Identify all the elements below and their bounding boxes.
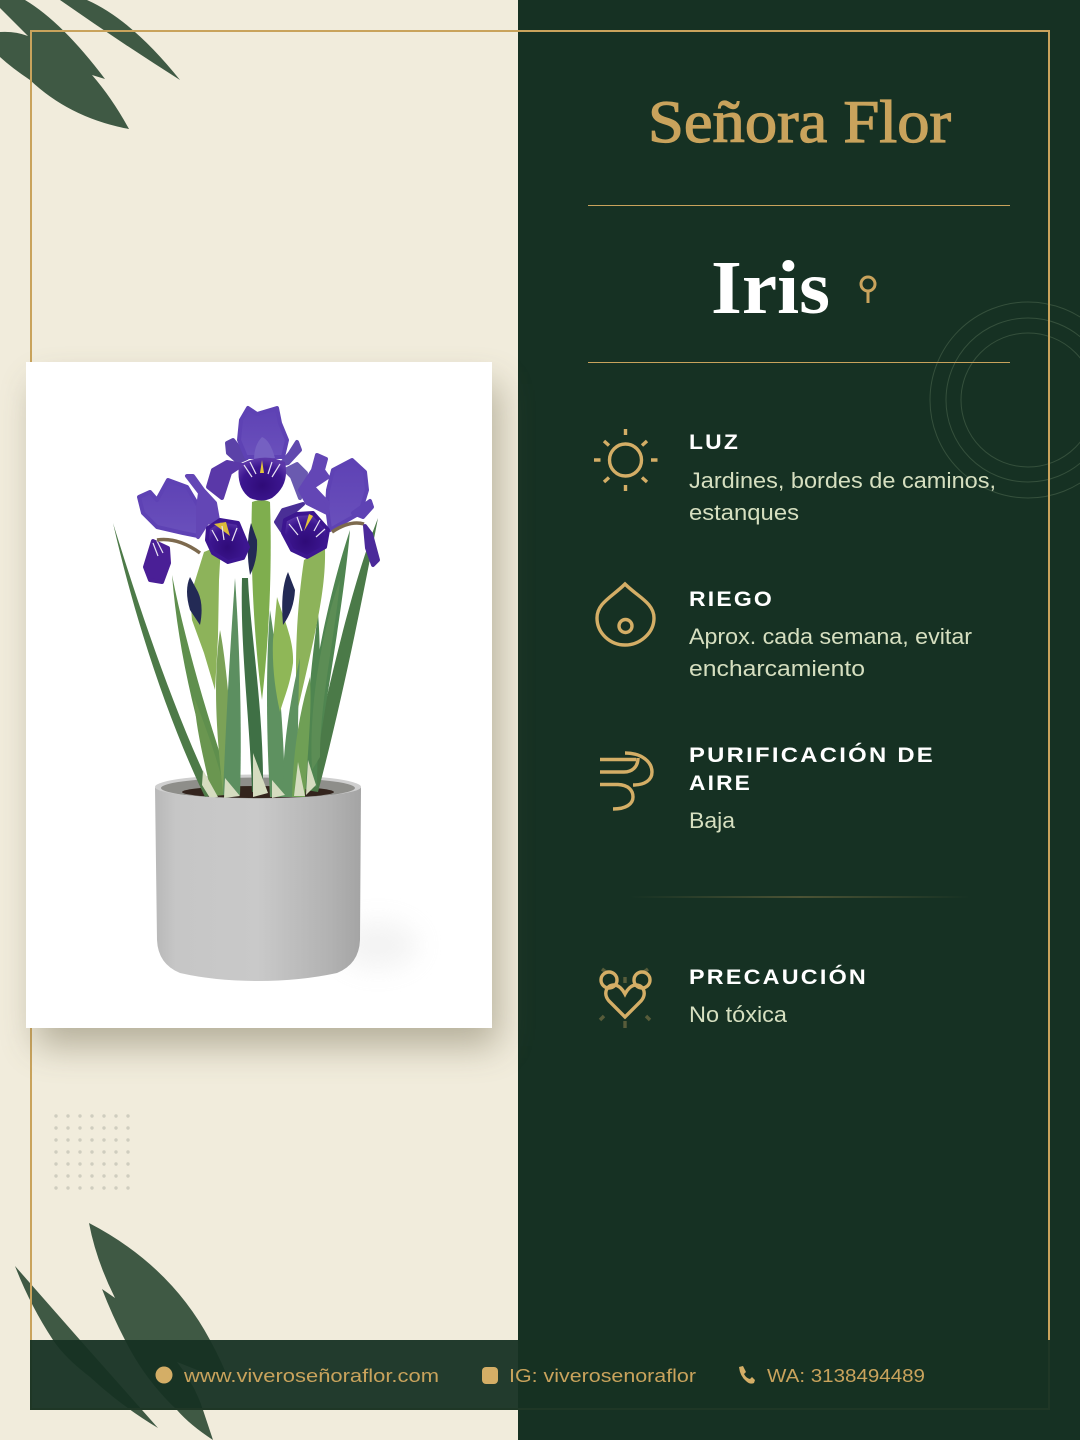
icon: water drop: [597, 584, 654, 645]
flower: left: [139, 476, 248, 582]
icon: heart with circles: [600, 969, 650, 1028]
decoration: dot grid: [54, 1114, 130, 1190]
label: precaución: PRECAUCIÓN: [689, 965, 868, 989]
divider: [588, 362, 1010, 363]
icon: instagram square: [482, 1367, 498, 1384]
text: riego description: encharcamiento: [689, 656, 865, 681]
label: purificación de aire: [689, 743, 935, 795]
label: purificación de aire: AIRE: [689, 772, 752, 795]
panel: dark green right background: [518, 0, 1080, 1440]
icon: phone: [739, 1366, 755, 1384]
panel: cream left background: [0, 0, 518, 1440]
pot interior: [155, 774, 361, 800]
label: riego: RIEGO: [689, 588, 774, 611]
left sheath: [190, 545, 221, 690]
plant name: Iris: [711, 246, 830, 330]
label: purificación de aire: PURIFICACIÓN DE: [689, 743, 935, 767]
text: precaución description: No tóxica: [689, 1002, 788, 1027]
brand title: Señora Flor: [648, 89, 951, 155]
icon: key pin: [861, 277, 875, 303]
iris flowers: [139, 408, 378, 582]
text: riego description: Aprox. cada semana, evitar: [689, 624, 973, 649]
section: luz: [594, 429, 996, 525]
text: luz description: estanques: [689, 500, 799, 525]
divider: [588, 205, 1010, 206]
footer bar: [30, 1340, 1050, 1410]
flower: right: [276, 455, 378, 565]
icon: sun: [594, 429, 658, 491]
section: purificación de aire: [600, 743, 935, 833]
pot cast shadow: [338, 921, 418, 969]
text: whatsapp: WA: 3138494489: [767, 1365, 925, 1386]
centre right sheath: [273, 597, 293, 712]
footer contacts: [156, 1365, 925, 1386]
section: precaución: [600, 965, 868, 1028]
text: aire description: Baja: [689, 808, 735, 833]
text: website: www.viveroseñoraflor.com: [183, 1365, 439, 1386]
text: instagram: IG: viverosenoraflor: [509, 1365, 696, 1386]
text: riego description: [689, 624, 973, 681]
flower: centre: [208, 408, 306, 500]
decoration: concentric circles: [930, 302, 1080, 498]
pot body: [155, 787, 361, 981]
text: luz description: Jardines, bordes de caminos,: [689, 468, 996, 493]
divider fade: [630, 896, 970, 898]
section: riego: [597, 584, 973, 681]
photo card: potted iris: [26, 362, 498, 1046]
iris leaves: [113, 500, 378, 798]
label: luz: LUZ: [689, 431, 740, 454]
central stem: [251, 500, 271, 700]
icon: web dot: [156, 1366, 172, 1384]
decoration: top-left leaves: [0, 0, 180, 129]
decoration: bottom-left leaves: [15, 1223, 230, 1440]
text: luz description: [689, 468, 996, 525]
icon: wind: [600, 753, 652, 809]
right sheath: [296, 548, 325, 713]
